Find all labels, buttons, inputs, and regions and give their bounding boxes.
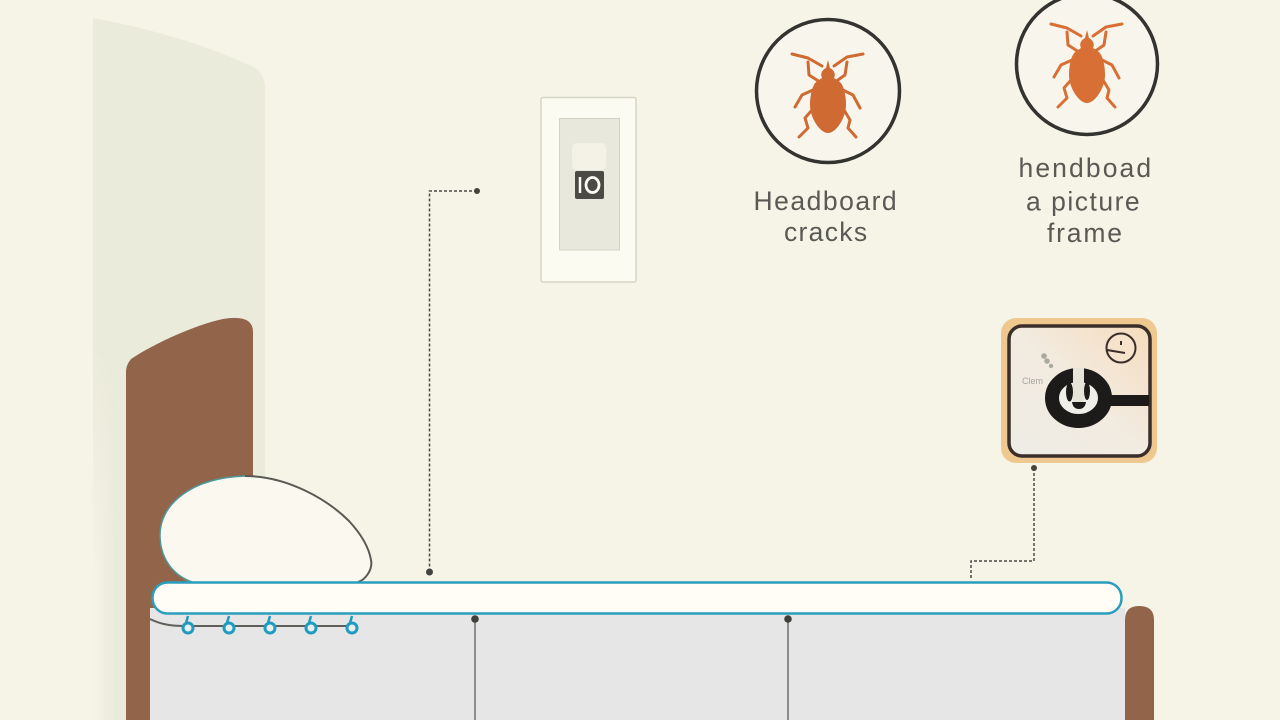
- icon: bug in circle, headboard cracks: [756, 20, 900, 162]
- pillow: [160, 476, 371, 583]
- mattress: [152, 582, 1122, 614]
- headboard: [126, 318, 253, 720]
- callout line: under mattress right: [784, 615, 792, 720]
- small blurred label: Clem: [1022, 376, 1043, 386]
- icon: power outlet panel: [1001, 318, 1157, 463]
- label: headboard cracks: cracks: [784, 217, 868, 247]
- mattress piping with beads: [150, 616, 357, 633]
- power ring and cord: [1052, 368, 1149, 421]
- small gauge: [1106, 334, 1136, 362]
- bed base: [150, 608, 1125, 720]
- footboard post: [1125, 606, 1154, 720]
- icon: wall light switch: [541, 98, 636, 282]
- callout line: wall switch to mattress: [426, 188, 480, 576]
- label: picture frame: a picture: [1026, 186, 1141, 216]
- label: picture frame: hendboad: [1018, 153, 1153, 183]
- callout line: power outlet to mattress: [971, 465, 1037, 580]
- callout line: under mattress left: [471, 615, 479, 720]
- wall panel behind headboard: [92, 18, 265, 720]
- small blurred marks: [1041, 353, 1053, 368]
- label: headboard cracks: Headboard: [754, 186, 898, 216]
- icon: bug in circle, picture frame: [1016, 0, 1158, 134]
- label: picture frame: frame: [1047, 218, 1124, 248]
